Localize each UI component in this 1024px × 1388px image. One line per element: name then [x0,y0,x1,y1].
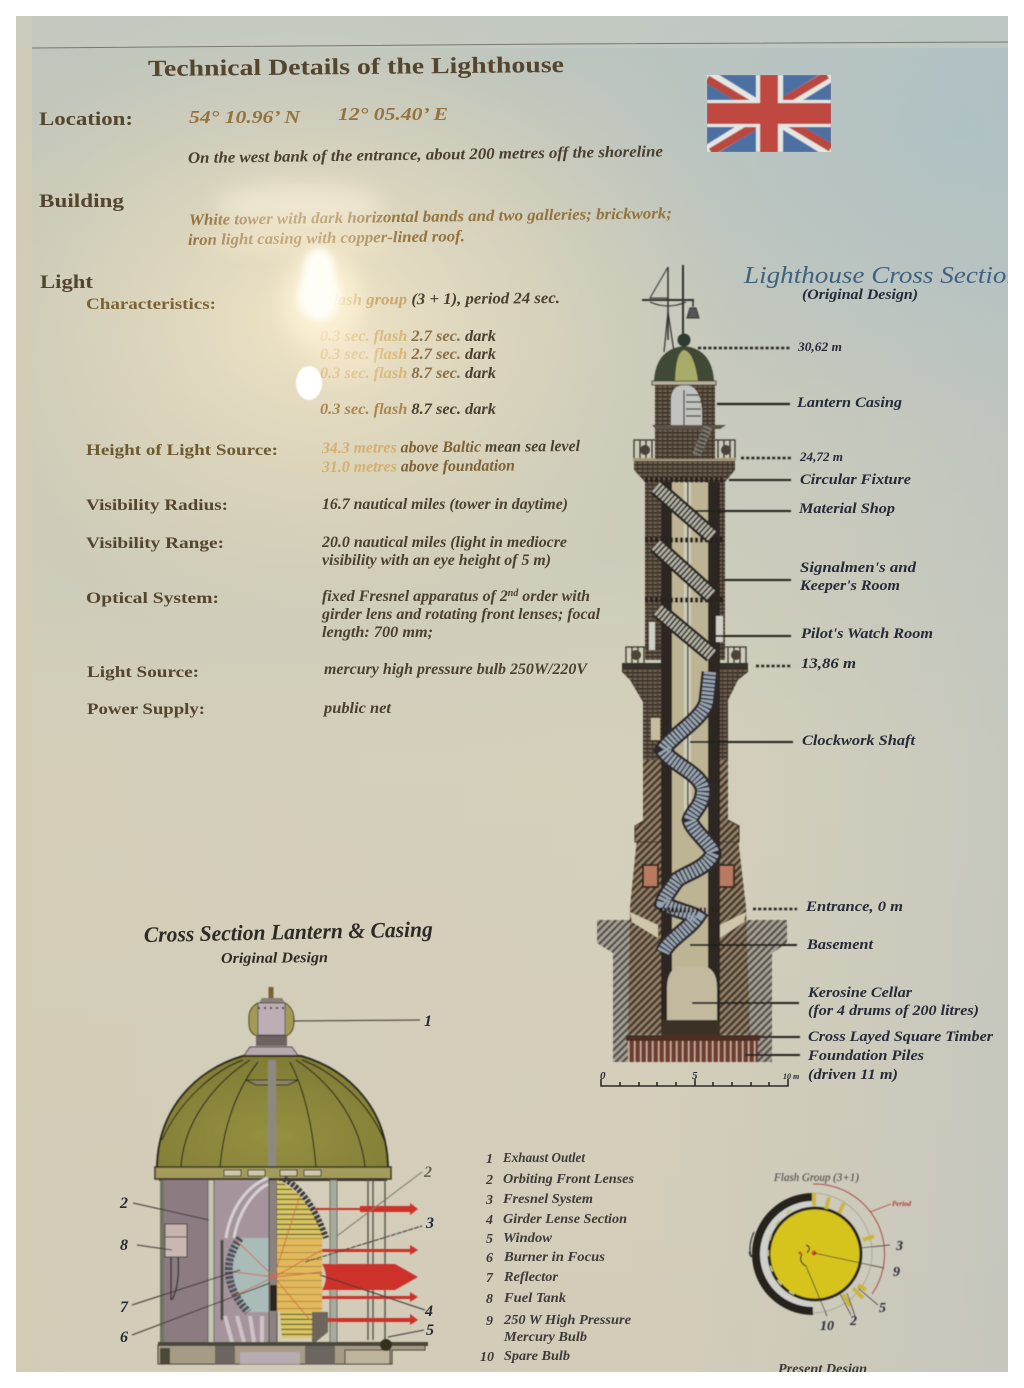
light details: 0.3 sec. flash 8.7 sec. dark [320,365,496,382]
upper corbel and gallery [634,459,735,482]
lantern callout numbers: 5 [426,1322,434,1339]
tower foundation masonry [628,838,750,1034]
red windows [643,865,658,887]
light details: girder lens and rotating front lenses; focal [321,606,601,623]
parts legend [480,1151,635,1365]
kerosine cellar [667,966,717,1020]
shaft [642,759,729,821]
lantern dome [654,346,714,381]
lighthouse cross section drawing [597,265,800,1062]
location block: 12° 05.40’ E [338,104,448,124]
light details: 0.3 sec. flash 2.7 sec. dark [320,328,496,345]
parts legend: 4 [485,1213,493,1228]
caption: flash group: Flash Group (3+1) [773,1170,859,1184]
light details: Characteristics: [86,296,216,313]
period arc [813,1184,885,1294]
light details: mercury high pressure bulb 250W/220V [324,661,588,678]
caption: present design: Present Design [778,1362,867,1377]
location block: 54° 10.96’ N [189,107,301,127]
lantern callout numbers: 4 [424,1303,433,1320]
title: Technical Details of the Lighthouse [148,52,564,81]
glare reflections [205,183,395,400]
light details: order with [518,588,590,605]
base platform [158,1339,428,1364]
lantern cross section drawing [132,987,428,1364]
diagram numbers: 9 [893,1265,900,1280]
tower labels: Clockwork Shaft [802,733,916,749]
light details: Height of Light Source: [86,442,278,459]
tower labels: Pilot's Watch Room [801,626,933,642]
lamp and leader lines [798,1245,890,1316]
diagram numbers [820,1239,903,1334]
building block: White tower with dark horizontal bands and two galleries; brickwork; [189,205,672,229]
parts legend: Reflector [503,1270,559,1285]
tower labels: 24,72 m [799,449,843,464]
parts legend: 250 W High Pressure [503,1313,631,1328]
tower labels: Material Shop [798,501,896,517]
location block: Location: [39,109,133,130]
parts legend: 1 [486,1152,493,1167]
icon: union jack flag [707,75,831,152]
tower labels: Lantern Casing [796,395,903,411]
floors [645,480,725,600]
parts legend: Fuel Tank [503,1291,566,1306]
supporting columns [330,1180,337,1343]
light details: 31.0 metres above foundation [321,457,515,476]
interior tube [672,482,708,1020]
parts legend: 8 [486,1292,493,1307]
light details: Light [40,272,94,293]
parts legend: Orbiting Front Lenses [503,1172,635,1187]
building block: iron light casing with copper-lined roof. [188,228,465,249]
parts legend: 10 [480,1350,494,1365]
light details: Visibility Range: [86,535,224,552]
light details: Optical System: [86,590,219,607]
light details: public net [322,700,392,717]
flash panels [814,1193,874,1306]
top staircases [656,487,712,655]
yellow rotating disc [756,1193,872,1313]
light details: visibility with an eye height of 5 m) [322,552,551,569]
parts legend: Window [503,1231,553,1246]
tower labels: Signalmen's and [800,560,917,576]
tower labels [796,339,993,1083]
tower labels: Cross Layed Square Timber [808,1029,993,1045]
light details: 0.3 sec. flash 8.7 sec. dark [320,401,496,418]
ground block [597,920,787,1062]
window niches [649,622,655,650]
building block [39,191,672,249]
light details: length: 700 mm; [322,624,433,641]
arrows: light beams [315,1203,418,1325]
lantern callout numbers: 6 [120,1329,128,1346]
fresnel lens [277,1179,328,1345]
lantern callout numbers: 2 [423,1164,432,1181]
collar [635,820,739,842]
light details: 0.3 sec. flash 2.7 sec. dark [320,346,496,363]
parts legend: Burner in Focus [503,1250,606,1265]
lantern callout numbers: 2 [119,1195,128,1212]
leader lines [132,1020,425,1337]
light details: 34.3 metres above Baltic mean sea level [321,438,581,457]
cornice band [155,1167,391,1179]
light rays from focus [234,1195,322,1320]
light details: Visibility Radius: [86,497,228,514]
scale bar: 10 m [783,1072,799,1081]
heading: lighthouse cross section: (Original Design) [802,287,918,303]
tower labels: 30,62 m [797,339,842,354]
scale bar [600,1070,799,1086]
light details: Power Supply: [87,701,205,718]
flash group diagram [749,1170,912,1334]
heading: cross section lantern and casing: Cross Section Lantern & Casing [144,916,433,947]
flash group diagram: Period [892,1200,912,1208]
light details: fixed Fresnel apparatus of 2 [322,588,509,605]
parts legend: Girder Lense Section [503,1212,627,1227]
lantern casing [655,385,715,459]
diagram numbers: 3 [895,1239,903,1254]
lower corbel and gallery [622,665,748,702]
tower labels: (for 4 drums of 200 litres) [808,1003,979,1019]
parts legend: 6 [486,1251,493,1266]
leader lines [690,348,800,1055]
parts legend: 2 [485,1173,493,1188]
parts legend: 7 [486,1271,494,1286]
scale bar: 5 [692,1070,698,1082]
light details: nd [508,588,519,599]
tower labels: 13,86 m [801,656,856,672]
lantern callout numbers [119,1013,434,1346]
tower labels: Basement [806,937,874,953]
lantern callout numbers: 1 [424,1013,432,1030]
parts legend: 9 [486,1314,493,1329]
dome [157,1056,388,1170]
lantern callout numbers: 7 [120,1299,129,1316]
tower labels: (driven 11 m) [808,1067,898,1083]
tower labels: Kerosine Cellar [807,985,912,1001]
lower spiral staircase [663,672,713,953]
diagram numbers: 2 [849,1314,857,1329]
light details: 16.7 nautical miles (tower in daytime) [322,496,568,513]
light details [40,272,601,718]
tower labels: Entrance, 0 m [805,899,903,915]
location block [39,108,662,164]
parts legend: Spare Bulb [504,1349,570,1364]
timber and piles [626,1035,760,1041]
heading: cross section lantern and casing [144,922,432,966]
scale bar: 0 [600,1070,606,1082]
tower labels: Foundation Piles [807,1048,924,1064]
heading: lighthouse cross section [744,266,1008,302]
diagram numbers: 5 [879,1301,886,1316]
location block: On the west bank of the entrance, about 200 metres off the shoreline [188,143,663,167]
diagram numbers: 10 [820,1319,834,1334]
lantern callout numbers: 8 [120,1237,128,1254]
parts legend: Mercury Bulb [503,1330,587,1345]
lantern callout numbers: 3 [425,1215,434,1232]
heading: lighthouse cross section: Lighthouse Cross Section [743,263,1020,289]
burner column [269,1180,277,1345]
light details: 20.0 nautical miles (light in mediocre [321,534,567,551]
parts legend: 3 [485,1193,493,1208]
rotation arrow [749,1232,754,1257]
tower labels: Keeper's Room [799,578,900,594]
building block: Building [39,191,125,212]
room interior [163,1180,208,1343]
mast and weather vane [642,265,699,352]
parts legend: Exhaust Outlet [502,1151,586,1166]
heading: cross section lantern and casing: Original Design [221,950,328,967]
reflector [222,1178,271,1342]
exhaust outlet [244,986,298,1056]
light details: Light Source: [87,664,199,681]
fuel tank [165,1224,187,1300]
light details: Flash group (3 + 1), period 24 sec. [321,290,560,309]
parts legend: 5 [486,1232,493,1247]
tower labels: Circular Fixture [800,472,911,488]
floor at entrance [660,908,720,912]
parts legend: Fresnel System [502,1192,593,1207]
